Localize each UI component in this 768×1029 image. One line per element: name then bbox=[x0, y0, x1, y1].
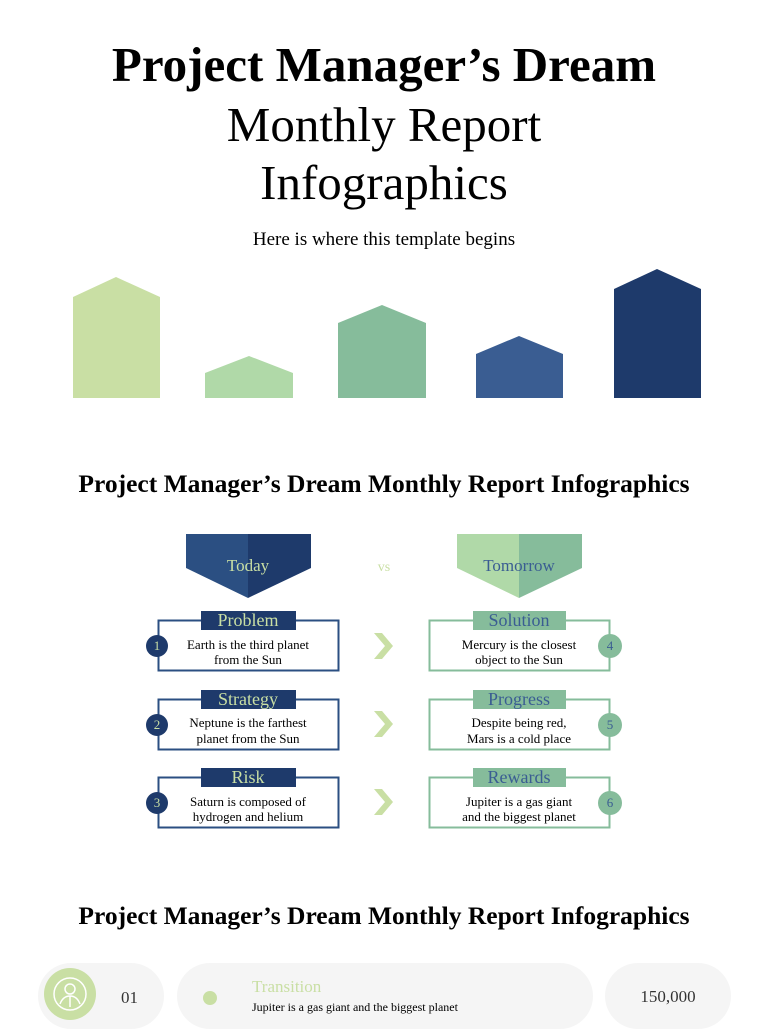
vs: vs bbox=[378, 560, 390, 575]
title: Project Manager’s Dream bbox=[112, 37, 656, 92]
tomorrow banner bbox=[457, 534, 582, 598]
row 1: Problem bbox=[218, 610, 278, 630]
row 2: planet from the Sun bbox=[197, 731, 300, 746]
pill: transition text: Jupiter is a gas giant and the biggest planet bbox=[252, 1000, 458, 1014]
row 3 bbox=[146, 767, 338, 828]
subtitle: Monthly Report bbox=[227, 97, 541, 152]
house bar chart bbox=[73, 269, 701, 398]
pill: transition text: Transition bbox=[252, 977, 321, 996]
row 1 bbox=[146, 610, 338, 670]
row 1: from the Sun bbox=[214, 652, 282, 667]
icon: person bbox=[44, 968, 96, 1020]
comparison diagram bbox=[146, 534, 622, 828]
row 2: 2 bbox=[154, 717, 160, 732]
row 2 bbox=[146, 689, 338, 750]
pill: icon and number: 01 bbox=[121, 988, 138, 1007]
today banner: Today bbox=[227, 556, 270, 575]
row 1: 1 bbox=[154, 638, 160, 653]
comparison diagram: and the biggest planet bbox=[462, 809, 576, 824]
pill: transition text bbox=[177, 963, 593, 1029]
comparison diagram: Despite being red, bbox=[472, 715, 566, 730]
row 2: Strategy bbox=[218, 689, 278, 709]
row 3: 3 bbox=[154, 795, 160, 810]
pill: icon and number bbox=[38, 963, 164, 1029]
today banner bbox=[186, 534, 311, 598]
section heading 1: Project Manager’s Dream Monthly Report Infographics bbox=[78, 469, 690, 498]
comparison diagram: Jupiter is a gas giant bbox=[466, 794, 572, 809]
pill: value: 150,000 bbox=[640, 987, 696, 1006]
arrows bbox=[374, 633, 393, 815]
pill: value bbox=[605, 963, 731, 1029]
row 3: Risk bbox=[231, 767, 265, 787]
comparison diagram: Mercury is the closest bbox=[462, 637, 577, 652]
subtitle bbox=[227, 97, 541, 210]
tomorrow banner: Tomorrow bbox=[483, 556, 555, 575]
comparison diagram: 5 bbox=[607, 717, 613, 732]
comparison diagram: Mars is a cold place bbox=[467, 731, 571, 746]
row 1: Earth is the third planet bbox=[187, 637, 309, 652]
comparison diagram: object to the Sun bbox=[475, 652, 563, 667]
row 3: Saturn is composed of bbox=[190, 794, 307, 809]
row 3: hydrogen and helium bbox=[193, 809, 303, 824]
comparison diagram: Progress bbox=[488, 689, 550, 709]
section heading 2: Project Manager’s Dream Monthly Report Infographics bbox=[78, 901, 690, 930]
bottom row bbox=[38, 963, 731, 1029]
subtitle: Infographics bbox=[260, 155, 508, 210]
tagline: Here is where this template begins bbox=[253, 229, 515, 250]
comparison diagram: 6 bbox=[607, 795, 614, 810]
comparison diagram: Rewards bbox=[488, 767, 550, 787]
comparison diagram: Solution bbox=[488, 610, 550, 630]
row 2: Neptune is the farthest bbox=[189, 715, 307, 730]
comparison diagram: 4 bbox=[607, 638, 614, 653]
